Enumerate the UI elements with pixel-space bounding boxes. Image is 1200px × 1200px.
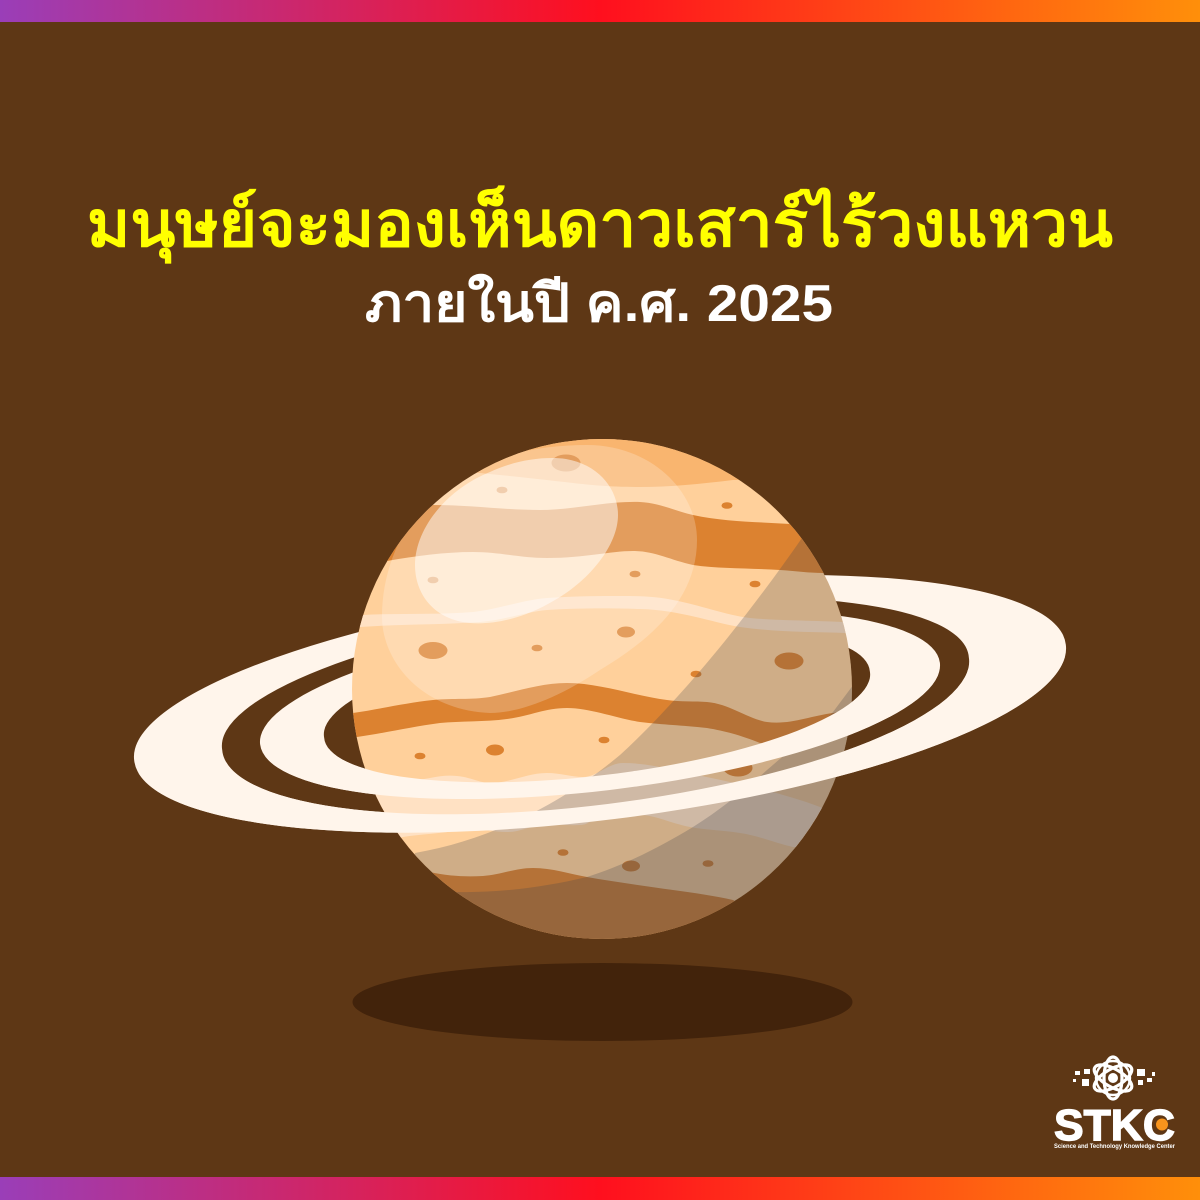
large highlight (382, 445, 697, 713)
surface spots (414, 454, 804, 872)
planet base (340, 430, 870, 950)
shadow overlay small (457, 687, 852, 939)
rings: back portion (134, 575, 1066, 833)
rings: front portion (138, 657, 1065, 833)
shadow overlay large (414, 538, 852, 939)
top gradient bar (0, 0, 1200, 22)
logo wordmark: STKC (1054, 1101, 1175, 1150)
logo atom icon (1090, 1057, 1136, 1099)
upper orange band (387, 502, 824, 573)
logo pixel squares (1073, 1069, 1155, 1086)
planet ground shadow (352, 963, 852, 1041)
logo orange dot (1156, 1118, 1168, 1130)
light wave band (340, 596, 860, 634)
lower light band (376, 763, 822, 847)
bottom orange band (432, 868, 734, 939)
logo tagline: Science and Technology Knowledge Center (1054, 1144, 1176, 1150)
bottom gradient bar (0, 1177, 1200, 1200)
top band (476, 439, 739, 487)
logo: STKC (1054, 1057, 1176, 1150)
planet (352, 439, 852, 939)
title: มนุษย์จะมองเห็นดาวเสาร์ไร้วงแหวน (87, 186, 1113, 264)
subtitle: ภายในปี ค.ศ. 2025 (365, 273, 833, 333)
lower orange band (340, 683, 870, 743)
small highlight (415, 458, 618, 623)
